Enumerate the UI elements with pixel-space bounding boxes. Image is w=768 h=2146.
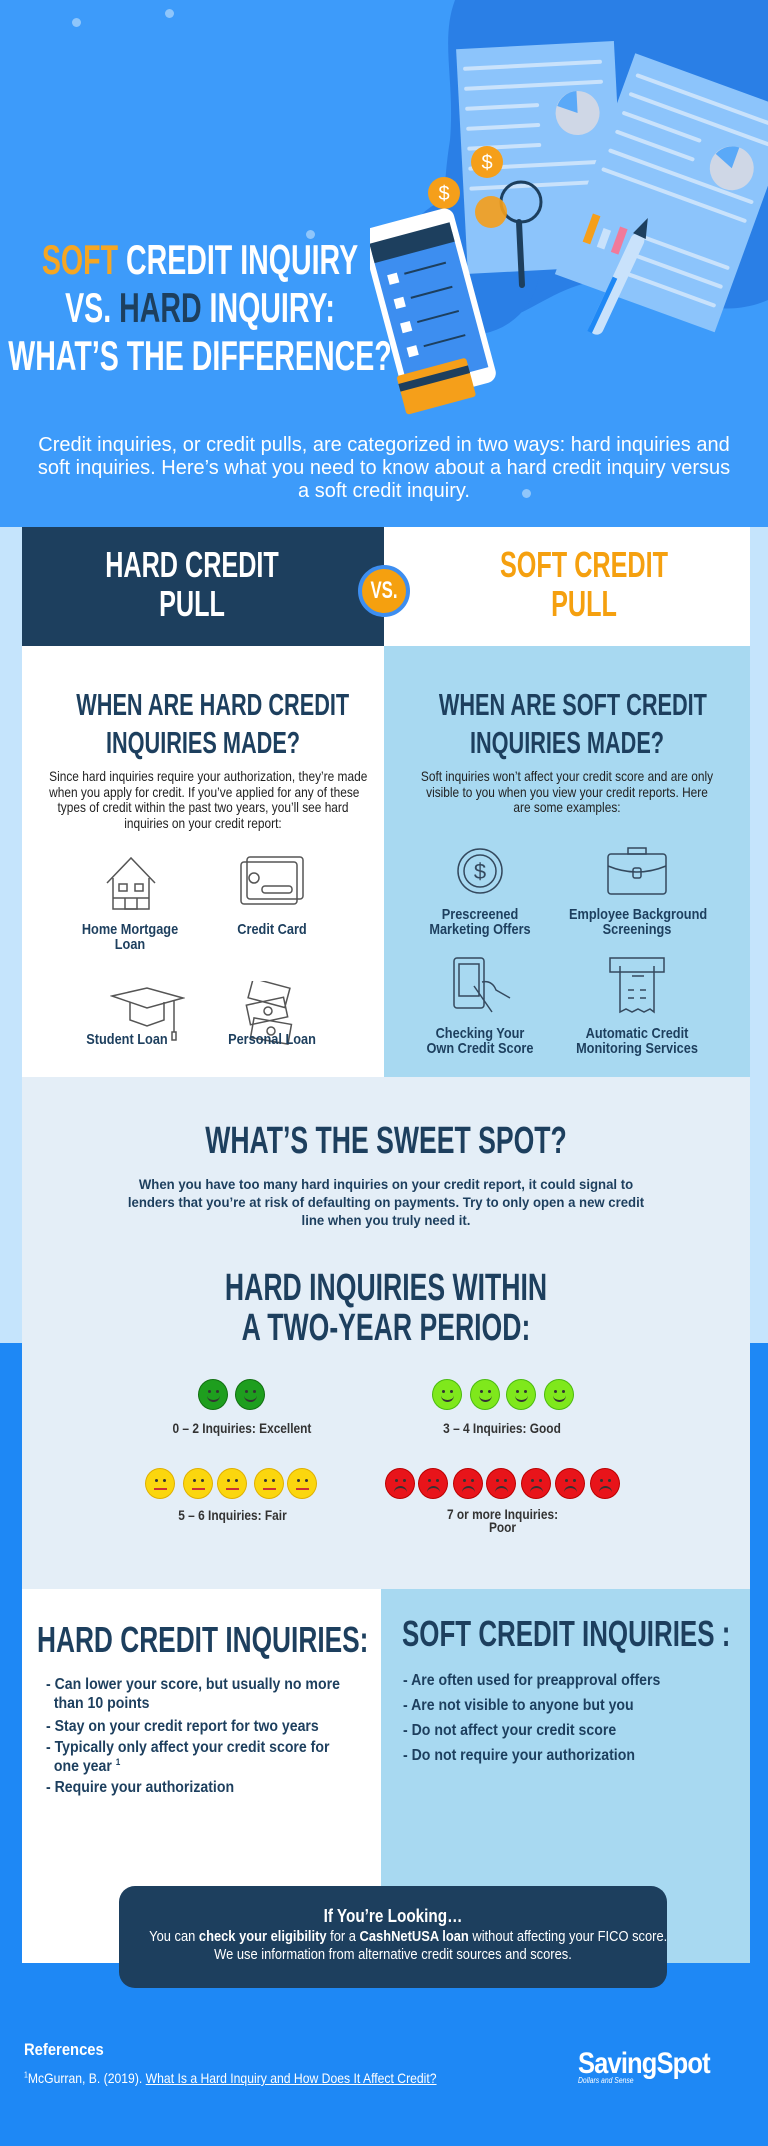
header background	[0, 0, 768, 527]
heading two-year: A TWO-YEAR PERIOD:	[242, 1307, 530, 1349]
panel: soft credit pull header: SOFT CREDIT	[500, 544, 668, 585]
vs badge: VS.	[370, 577, 398, 604]
icon: receipt	[609, 957, 665, 1014]
bullets soft: - Are often used for preapproval offers	[403, 1672, 660, 1689]
text soft when: visible to you when you view your credit reports. Here	[426, 784, 708, 800]
heading soft when	[438, 687, 707, 760]
logo: SavingSpot: SavingSpot	[578, 2047, 710, 2080]
rating: poor: Poor	[489, 1519, 516, 1535]
rating: excellent	[172, 1379, 312, 1436]
text sweet spot: When you have too many hard inquiries on your credit report, it could signal to	[139, 1176, 633, 1192]
text soft when: are some examples:	[513, 799, 621, 815]
intro text: soft inquiries. Here’s what you need to know about a hard credit inquiry versus	[38, 457, 730, 479]
title	[8, 236, 392, 379]
label employee: Employee Background	[569, 906, 707, 923]
vs badge	[358, 565, 410, 617]
panel: sweet spot	[22, 1077, 750, 1589]
bullets hard: than 10 points	[54, 1695, 149, 1712]
label automatic monitoring	[576, 1025, 698, 1057]
bullets hard: one year 1	[54, 1757, 120, 1775]
label prescreened	[429, 906, 531, 938]
logo: SavingSpot: Dollars and Sense	[578, 2076, 634, 2085]
text hard when: Since hard inquiries require your authorization, they’re made	[49, 768, 367, 784]
references: References	[24, 2040, 104, 2059]
label prescreened: Marketing Offers	[429, 921, 531, 938]
bullets hard	[46, 1676, 340, 1796]
callout: if you're looking: We use information from alternative credit sources and scores.	[214, 1947, 572, 1963]
panel: hard credit pull header: PULL	[159, 583, 225, 624]
text sweet spot: lenders that you’re at risk of defaulting on payments. Try to only open a new credit	[128, 1194, 644, 1210]
icon: briefcase	[607, 847, 667, 895]
rating: poor	[385, 1468, 620, 1535]
heading sweet spot: WHAT’S THE SWEET SPOT?	[205, 1120, 567, 1162]
panel: soft credit pull header	[384, 527, 750, 646]
heading two-year	[225, 1267, 547, 1349]
bullets soft: - Do not require your authorization	[403, 1747, 635, 1764]
text soft when: Soft inquiries won’t affect your credit score and are only	[421, 768, 713, 784]
label student loan: Student Loan	[86, 1031, 168, 1048]
icon: house	[106, 857, 156, 910]
panel: soft credit pull header: PULL	[551, 583, 617, 624]
panel: when soft inquiries	[384, 646, 750, 1077]
icon: dollar coin	[457, 848, 503, 894]
text hard when: types of credit within the past two years, you’ll see hard	[57, 799, 349, 815]
label home mortgage	[82, 921, 178, 953]
label checking score	[427, 1025, 533, 1057]
references: 1McGurran, B. (2019). What Is a Hard Inquiry and How Does It Affect Credit?	[24, 2070, 437, 2086]
heading soft list: SOFT CREDIT INQUIRIES :	[402, 1613, 730, 1654]
side borders light	[0, 527, 768, 1343]
heading hard when	[76, 687, 349, 760]
label credit card: Credit Card	[237, 921, 307, 938]
label personal loan: Personal Loan	[228, 1031, 316, 1048]
label checking score: Own Credit Score	[427, 1040, 533, 1057]
bullets hard: - Can lower your score, but usually no more	[46, 1676, 340, 1693]
heading hard when: WHEN ARE HARD CREDIT	[76, 687, 349, 722]
heading soft when: WHEN ARE SOFT CREDIT	[439, 687, 707, 722]
icon: dollar coin: $	[474, 859, 486, 884]
rating: excellent: 0 – 2 Inquiries: Excellent	[172, 1420, 311, 1436]
callout: if you're looking	[119, 1886, 667, 1988]
text sweet spot: line when you truly need it.	[302, 1212, 470, 1228]
illustration: credit documents and phone: $	[438, 183, 450, 205]
rating: poor: 7 or more Inquiries:	[447, 1506, 558, 1522]
panel: hard credit inquiries list	[22, 1589, 381, 1963]
intro text: Credit inquiries, or credit pulls, are categorized in two ways: hard inquiries and	[38, 434, 730, 456]
bullets hard: - Typically only affect your credit score for	[46, 1739, 329, 1756]
label home mortgage: Loan	[115, 936, 145, 953]
rating: fair	[145, 1468, 317, 1523]
intro text	[38, 434, 730, 502]
panel: soft credit inquiries list	[381, 1589, 750, 1963]
decorative dots	[72, 18, 81, 27]
illustration: credit documents and phone: $	[481, 152, 493, 174]
title: VS. HARD INQUIRY:	[65, 284, 335, 331]
text hard when	[49, 768, 367, 831]
blue side bottom	[0, 1343, 768, 2146]
rating: good	[432, 1379, 574, 1436]
intro text: a soft credit inquiry.	[298, 480, 470, 502]
label home mortgage: Home Mortgage	[82, 921, 178, 938]
title: SOFT CREDIT INQUIRY	[42, 236, 358, 283]
heading soft when: INQUIRIES MADE?	[470, 725, 664, 760]
rating: good: 3 – 4 Inquiries: Good	[443, 1420, 561, 1436]
illustration: credit documents and phone	[370, 0, 768, 414]
bullets hard: - Require your authorization	[46, 1779, 234, 1796]
bullets hard: - Stay on your credit report for two years	[46, 1718, 319, 1735]
heading hard when: INQUIRIES MADE?	[106, 725, 300, 760]
callout: if you're looking: If You’re Looking…	[324, 1906, 462, 1926]
panel: hard credit pull header: HARD CREDIT	[105, 544, 279, 585]
label prescreened: Prescreened	[442, 906, 518, 923]
rating: fair: 5 – 6 Inquiries: Fair	[178, 1507, 287, 1523]
icon: credit card	[240, 856, 304, 905]
text sweet spot	[128, 1176, 644, 1228]
bullets soft	[403, 1672, 660, 1764]
label employee: Screenings	[603, 921, 671, 938]
panel: when hard inquiries	[22, 646, 384, 1077]
heading hard list: HARD CREDIT INQUIRIES:	[37, 1619, 368, 1660]
references	[24, 2040, 437, 2086]
label automatic monitoring: Automatic Credit	[586, 1025, 688, 1042]
bullets soft: - Do not affect your credit score	[403, 1722, 616, 1739]
label employee	[569, 906, 707, 938]
text hard when: when you apply for credit. If you’ve applied for any of these	[49, 784, 359, 800]
icon: graduation cap	[110, 987, 185, 1041]
heading two-year: HARD INQUIRIES WITHIN	[225, 1267, 547, 1309]
text hard when: inquiries on your credit report:	[124, 814, 282, 830]
label checking score: Checking Your	[436, 1025, 524, 1042]
label automatic monitoring: Monitoring Services	[576, 1040, 698, 1057]
callout: if you're looking: You can check your eligibility for a CashNetUSA loan without affecting your FICO score.	[149, 1929, 667, 1945]
title: WHAT’S THE DIFFERENCE?	[8, 332, 392, 379]
icon: cash	[246, 981, 292, 1045]
icon: phone touch	[453, 957, 510, 1012]
text soft when	[421, 768, 713, 815]
bullets soft: - Are not visible to anyone but you	[403, 1697, 634, 1714]
panel: hard credit pull header	[22, 527, 384, 646]
